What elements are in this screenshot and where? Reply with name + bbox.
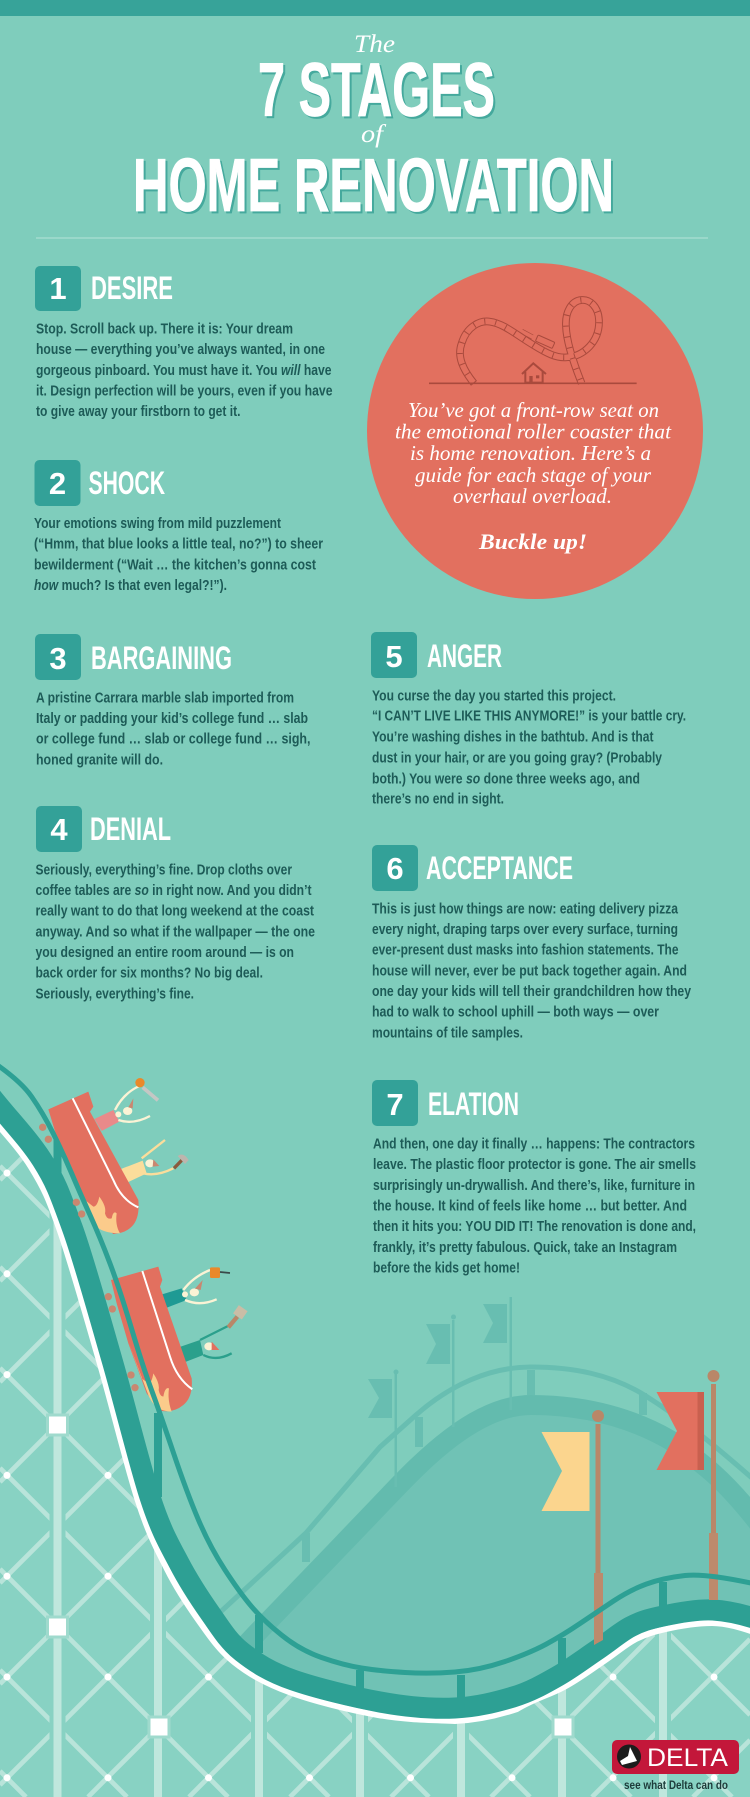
illustration: flags <box>542 1370 720 1645</box>
panel: stage 5 anger: “I CAN’T LIVE LIKE THIS ANYMORE!” is your battle cry. <box>372 708 686 724</box>
intro text: is home renovation. Here’s a <box>410 441 651 465</box>
panel: stage 6 acceptance: one day your kids will tell their grandchildren how they <box>372 984 691 1000</box>
panel: stage 7 elation: 7 <box>386 1087 404 1122</box>
panel: stage 6 acceptance: 6 <box>386 851 404 886</box>
panel: stage 6 acceptance: house will never, ever be put back together again. And <box>372 964 687 980</box>
panel: stage 4 denial: 4 <box>50 812 68 847</box>
panel: stage 4 denial: Seriously, everything’s fine. <box>36 986 194 1002</box>
illustration: roller coaster cars with riders <box>39 1078 248 1412</box>
panel: stage 4 denial: really want to do that long weekend at the coast <box>36 904 314 920</box>
panel: stage 6 acceptance: ACCEPTANCE <box>426 850 573 886</box>
panel: stage 7 elation: the house. It kind of feels like home … but better. And <box>373 1198 687 1214</box>
panel: intro circle <box>367 263 703 599</box>
panel: stage 6 acceptance: ever-present dust masks into fashion statements. The <box>372 942 678 958</box>
panel: stage 7 elation: frankly, it’s pretty fabulous. Quick, take an Instagram <box>373 1240 677 1256</box>
panel: stage 4 denial: DENIAL <box>90 811 171 847</box>
panel: stage 5 anger: 5 <box>385 639 403 674</box>
panel: stage 3 bargaining <box>35 634 310 768</box>
illustration: upper rail <box>0 1060 750 1673</box>
panel: stage 1 desire: gorgeous pinboard. You must have it. You will have <box>36 363 332 379</box>
panel: stage 4 denial: anyway. And so what if the wallpaper — the one <box>36 924 315 940</box>
intro text: Buckle up! <box>478 529 587 554</box>
panel: stage 5 anger: You curse the day you started this project. <box>372 688 616 704</box>
panel: stage 3 bargaining: A pristine Carrara marble slab imported from <box>36 690 294 706</box>
panel: stage 2 shock: (“Hmm, that blue looks a little teal, no?”) to sheer <box>34 536 323 552</box>
panel: stage 2 shock <box>34 460 323 594</box>
panel: stage 6 acceptance: every night, draping tarps over every surface, turning <box>372 922 678 938</box>
panel: stage 6 acceptance: mountains of tile samples. <box>372 1026 523 1042</box>
panel: stage 1 desire <box>35 266 332 420</box>
title: The <box>354 31 395 58</box>
flag: coral <box>656 1370 720 1600</box>
intro text <box>395 398 672 554</box>
intro text: the emotional roller coaster that <box>395 420 672 444</box>
panel: stage 5 anger: dust in your hair, or are you going gray? (Probably <box>372 750 662 766</box>
panel: stage 2 shock: Your emotions swing from mild puzzlement <box>34 516 281 532</box>
panel: stage 7 elation <box>372 1080 696 1276</box>
flag: yellow <box>542 1410 604 1645</box>
car 1 with wrench and hammer riders <box>39 1078 189 1234</box>
panel: stage 3 bargaining: Italy or padding your kid’s college fund … slab <box>36 711 308 727</box>
panel: stage 2 shock: bewilderment (“Wait … the kitchen’s gonna cost <box>34 558 316 574</box>
icon: white lattice joint squares <box>48 1415 573 1737</box>
panel: stage 1 desire: house — everything you’ve always wanted, in one <box>36 342 325 358</box>
panel: stage 6 acceptance <box>372 845 691 1042</box>
title: 7 STAGES <box>258 48 495 133</box>
illustration: lattice supports <box>0 1090 750 1797</box>
panel: stage 5 anger: both.) You were so done three weeks ago, and <box>372 772 640 788</box>
illustration: main coaster track <box>0 1095 750 1721</box>
panel: stage 2 shock: SHOCK <box>88 465 165 501</box>
panel: stage 3 bargaining: honed granite will do. <box>36 752 163 768</box>
panel: stage 4 denial: back order for six months? No big deal. <box>36 966 263 982</box>
panel: stage 5 anger: ANGER <box>427 638 502 674</box>
top bar <box>0 0 750 16</box>
panel: stage 7 elation: leave. The plastic floor protector is gone. The air smells <box>373 1157 696 1173</box>
panel: stage 1 desire: it. Design perfection will be yours, even if you have <box>36 384 332 400</box>
car 2 with drill and brush riders <box>105 1267 248 1412</box>
panel: stage 7 elation: before the kids get home! <box>373 1260 520 1276</box>
panel: stage 2 shock: how much? Is that even legal?!”). <box>34 578 227 594</box>
panel: stage 4 denial: you designed an entire room around — is on <box>36 945 294 961</box>
panel: stage 7 elation: ELATION <box>428 1086 519 1122</box>
panel: stage 3 bargaining: BARGAINING <box>91 640 232 676</box>
panel: stage 4 denial: Seriously, everything’s fine. Drop cloths over <box>36 862 292 878</box>
faint flags <box>368 1297 512 1487</box>
icon: roller coaster and house <box>429 300 637 383</box>
illustration: faint background coaster hill <box>215 1297 750 1715</box>
panel: stage 5 anger: there’s no end in sight. <box>372 792 504 808</box>
panel: stage 5 anger: You’re washing dishes in the bathtub. And is that <box>372 730 654 746</box>
panel: stage 7 elation: And then, one day it finally … happens: The contractors <box>373 1136 695 1152</box>
title <box>133 31 614 227</box>
panel: stage 1 desire: 1 <box>49 271 67 306</box>
panel: stage 4 denial <box>36 806 315 1002</box>
panel: stage 4 denial: coffee tables are so in right now. And you didn’t <box>36 883 312 899</box>
logo: delta: see what Delta can do <box>624 1778 728 1792</box>
panel: stage 7 elation: surprisingly un-drywallish. And there’s, like, furniture in <box>373 1178 695 1194</box>
intro text: overhaul overload. <box>453 484 612 508</box>
title: of <box>361 121 386 148</box>
logo: delta: DELTA <box>647 1744 728 1772</box>
panel: stage 1 desire: DESIRE <box>91 270 173 306</box>
panel: stage 5 anger <box>371 632 686 808</box>
panel: stage 6 acceptance: This is just how things are now: eating delivery pizza <box>372 902 679 918</box>
panel: stage 3 bargaining: 3 <box>49 641 67 676</box>
panel: stage 3 bargaining: or college fund … slab or college fund … sigh, <box>36 732 310 748</box>
intro text: You’ve got a front-row seat on <box>408 398 659 422</box>
panel: stage 6 acceptance: had to walk to school uphill — both ways — over <box>372 1004 659 1020</box>
panel: stage 2 shock: 2 <box>49 466 66 501</box>
logo: delta <box>612 1740 739 1792</box>
panel: stage 1 desire: to give away your firstborn to get it. <box>36 404 240 420</box>
panel: stage 1 desire: Stop. Scroll back up. There it is: Your dream <box>36 322 293 338</box>
intro text: guide for each stage of your <box>415 463 652 487</box>
